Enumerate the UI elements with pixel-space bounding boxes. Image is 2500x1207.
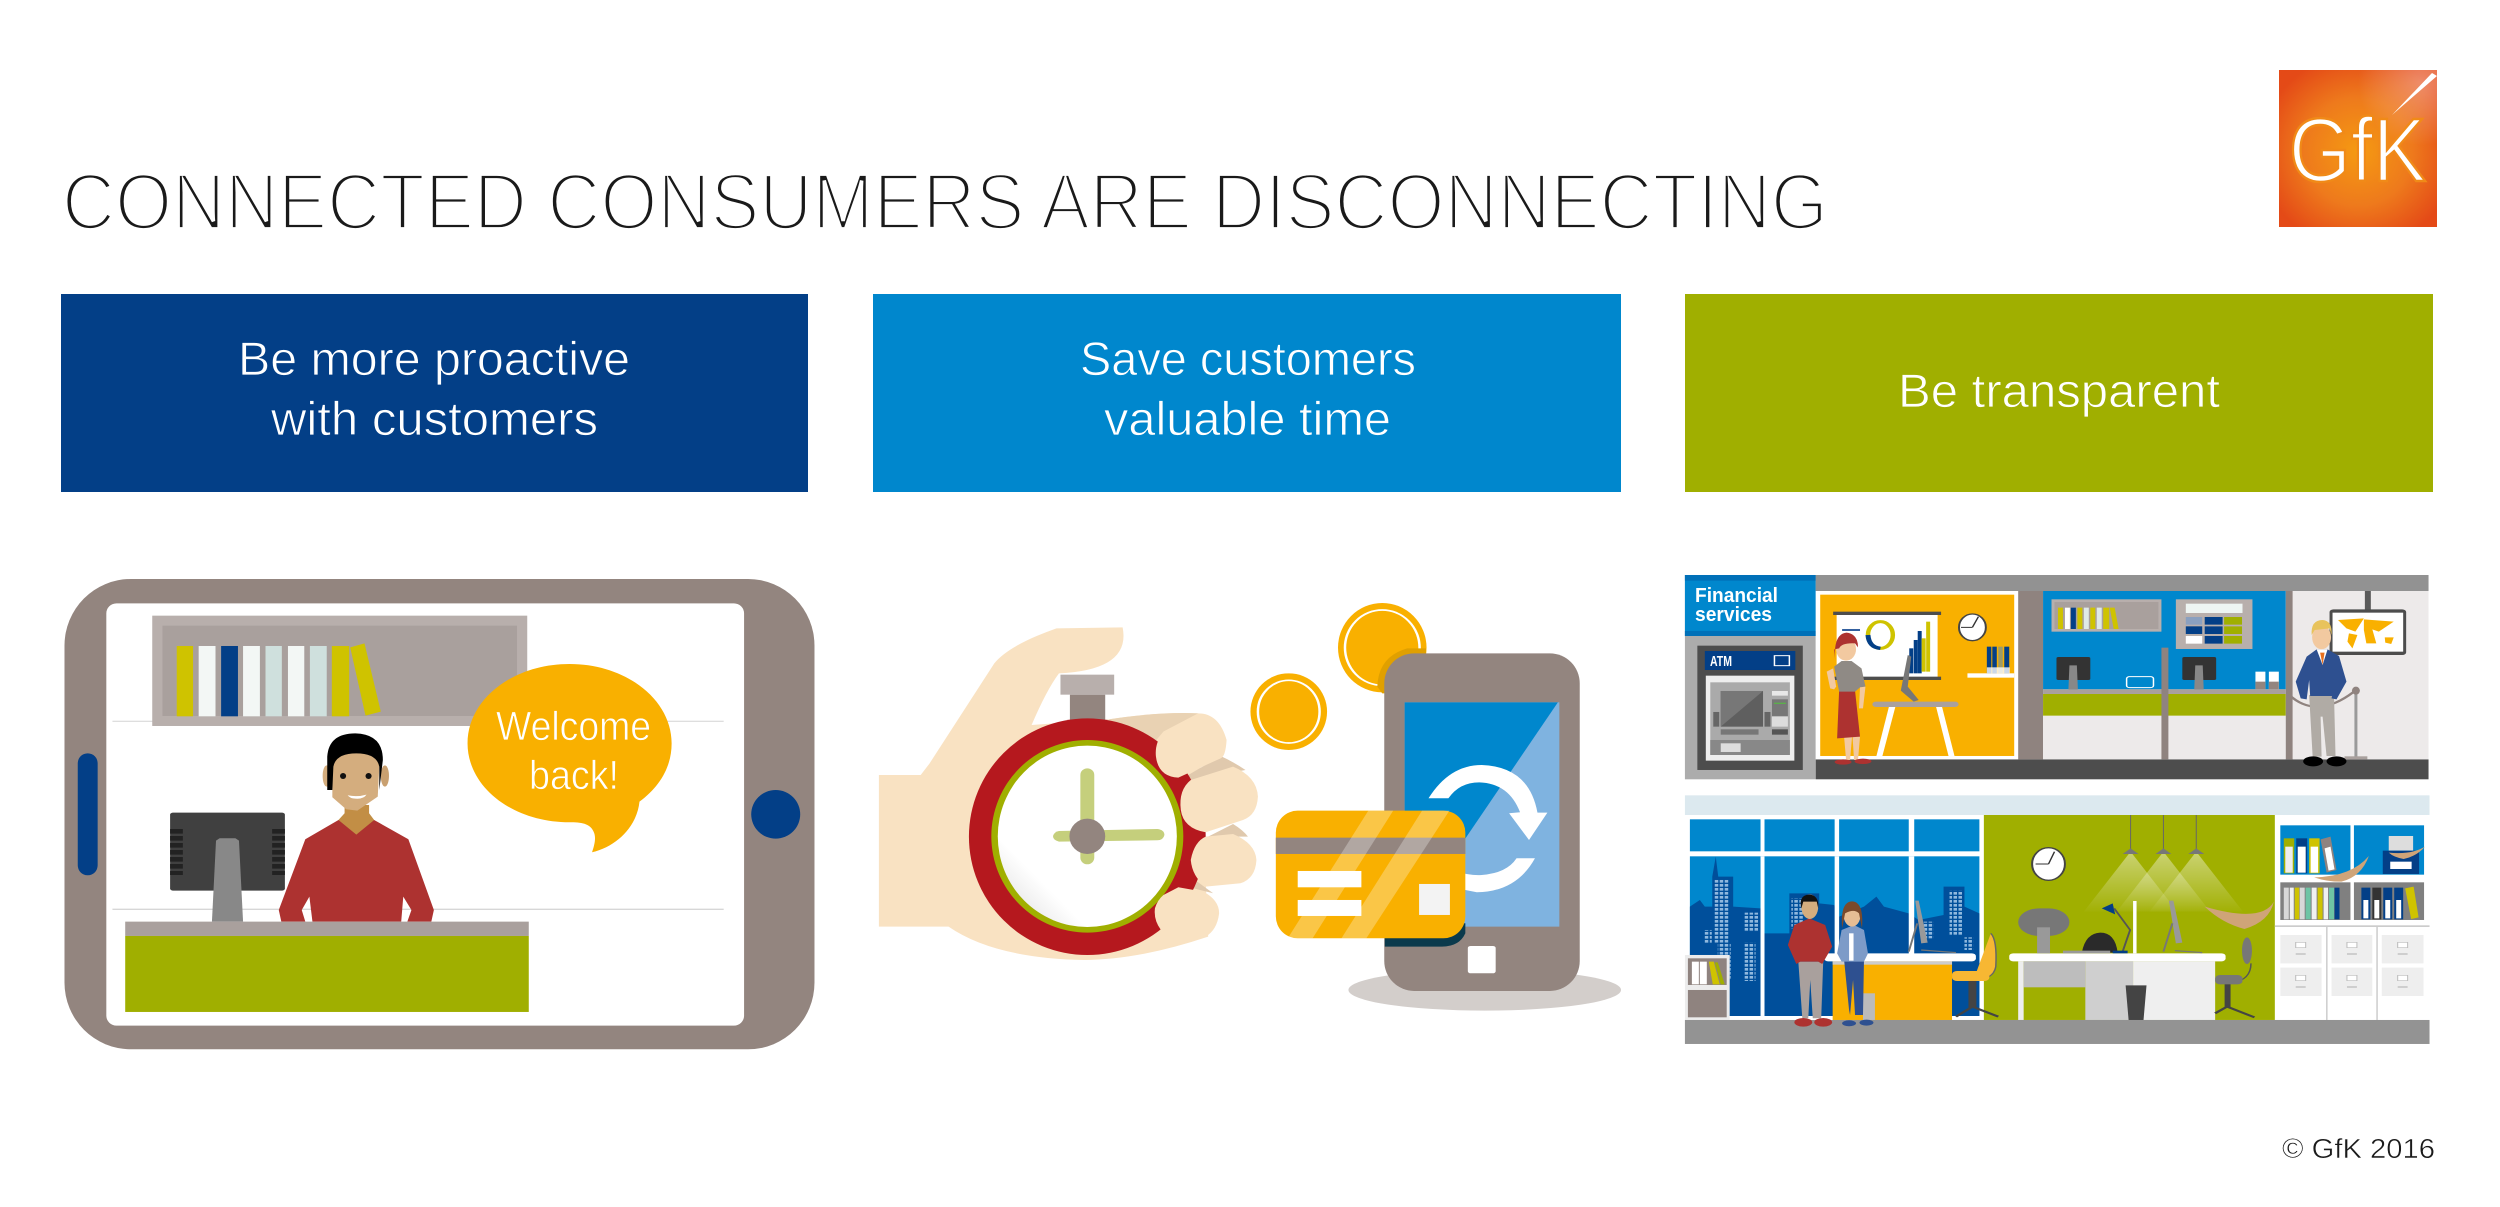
title: CONNECTED CONSUMERS ARE DISCONNECTING — [62, 157, 1828, 246]
floor — [1685, 1020, 2430, 1044]
stopwatch crown — [1060, 675, 1114, 721]
clerk figure — [279, 733, 434, 922]
illustration: hand with stopwatch, coins, card and phone — [879, 603, 1621, 1011]
left desk — [1824, 901, 1998, 1020]
man — [2296, 620, 2346, 766]
bookshelf — [152, 616, 527, 726]
desk counter — [125, 922, 529, 1012]
illustration: tablet with bank clerk — [64, 579, 814, 1049]
hand — [879, 627, 1208, 960]
panel: be more proactive: with customers — [270, 392, 598, 445]
shoes — [1794, 1018, 1873, 1027]
panel: be more proactive — [61, 294, 808, 492]
rope barrier — [2289, 687, 2367, 759]
GfK logo: GfK — [2289, 101, 2426, 201]
speech bubble text: back! — [529, 752, 619, 798]
sign background — [1685, 575, 1816, 636]
right wall with world map screen — [2293, 591, 2429, 759]
illustration: bank branch — [1685, 575, 2429, 779]
panel: save customers valuable time: Save customers — [1080, 332, 1416, 385]
woman — [1827, 633, 1871, 765]
ATM label: ATM — [1710, 653, 1732, 670]
sign text — [1695, 584, 1778, 626]
sync arrows — [1429, 765, 1547, 892]
sign text: services — [1695, 603, 1772, 626]
panel: be transparent: Be transparent — [1898, 364, 2220, 417]
speech bubble text: Welcome — [496, 703, 651, 749]
man standing — [1788, 894, 1832, 1018]
orange room — [1816, 591, 2018, 759]
speech bubble text — [496, 703, 651, 798]
speech bubble shape — [468, 664, 672, 852]
phone — [1384, 653, 1580, 991]
right desk — [2009, 901, 2254, 1020]
coins — [1250, 603, 1427, 750]
GfK logo — [2279, 70, 2437, 227]
copyright: © GfK 2016 — [2282, 1133, 2435, 1164]
ATM machine — [1697, 646, 1803, 770]
sign text: Financial — [1695, 584, 1778, 607]
panel: save customers valuable time — [873, 294, 1621, 492]
windows with skyline — [1690, 819, 1979, 1016]
woman standing — [1837, 901, 1868, 1015]
storage shelves — [2275, 825, 2430, 1020]
credit card — [1276, 811, 1465, 947]
low shelf — [1685, 955, 1730, 1020]
green wall — [1984, 815, 2275, 1020]
illustration: office — [1685, 795, 2430, 1044]
shadow — [1348, 969, 1621, 1011]
teller wall — [2043, 591, 2286, 759]
monitor — [170, 813, 285, 922]
panel: save customers valuable time: valuable time — [1104, 392, 1391, 445]
fingers — [1155, 713, 1258, 937]
panel: be more proactive: Be more proactive — [238, 332, 630, 385]
stopwatch — [969, 718, 1206, 955]
panel: be transparent — [1685, 294, 2433, 492]
